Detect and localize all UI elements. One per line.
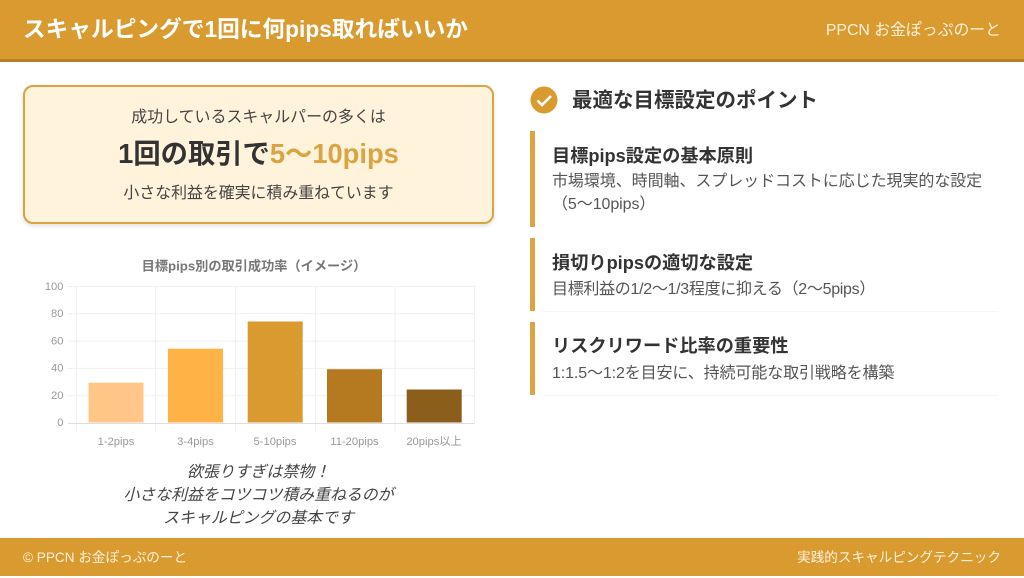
chart caption: 小さな利益をコツコツ積み重ねるのが <box>123 487 394 504</box>
header bar <box>0 0 1024 62</box>
section heading text: 最適な目標設定のポイント <box>572 89 818 112</box>
y axis labels: 60 <box>51 336 64 348</box>
point 2 title: 損切りpipsの適切な設定 <box>552 253 753 273</box>
y axis labels: 40 <box>51 362 64 374</box>
chart title: 目標pips別の取引成功率（イメージ） <box>142 258 366 274</box>
x axis labels: 11-20pips <box>330 436 379 448</box>
y axis labels: 100 <box>45 281 64 293</box>
callout panel <box>23 85 494 224</box>
point 2 accent bar <box>530 238 535 311</box>
point 2 description: 目標利益の1/2〜1/3程度に抑える（2〜5pips） <box>552 280 875 298</box>
x axis labels: 3-4pips <box>177 436 214 448</box>
point 1 description: （5〜10pips） <box>552 196 655 213</box>
footer topic: 実践的スキャルピングテクニック <box>797 550 1001 565</box>
point 3 accent bar <box>530 322 535 395</box>
point 1 accent bar <box>530 131 535 227</box>
callout sub text: 小さな利益を確実に積み重ねています <box>123 185 394 202</box>
title: スキャルピングで1回に何pips取ればいいか <box>23 16 468 42</box>
chart caption: 欲張りすぎは禁物！ <box>187 464 330 481</box>
x axis labels: 20pips以上 <box>406 435 462 448</box>
callout lead text: 成功しているスキャルパーの多くは <box>131 109 386 126</box>
header brand: PPCN お金ぽっぷのーと <box>826 22 1001 39</box>
icon: check circle <box>530 86 558 114</box>
point 3 title: リスクリワード比率の重要性 <box>552 336 788 356</box>
x axis labels: 5-10pips <box>254 436 297 448</box>
point 3 <box>530 322 894 395</box>
footer copyright: © PPCN お金ぽっぷのーと <box>23 550 187 565</box>
footer bar <box>0 538 1024 576</box>
y axis labels: 80 <box>51 308 64 320</box>
point 2 <box>530 238 875 311</box>
bar chart <box>45 258 475 448</box>
x axis labels: 1-2pips <box>98 436 135 448</box>
point 1 <box>530 131 982 227</box>
point 1 description <box>552 172 982 213</box>
x axis labels <box>98 435 462 448</box>
bars <box>88 322 462 422</box>
y axis labels <box>45 281 64 429</box>
point 3 description: 1:1.5〜1:2を目安に、持続可能な取引戦略を構築 <box>552 364 894 382</box>
chart caption <box>123 464 396 527</box>
section heading <box>530 86 818 114</box>
point 1 title: 目標pips設定の基本原則 <box>552 146 753 166</box>
y axis labels: 20 <box>51 390 64 402</box>
point 1 description: 市場環境、時間軸、スプレッドコストに応じた現実的な設定 <box>552 173 982 190</box>
callout key message: 1回の取引で5〜10pips <box>118 138 399 169</box>
chart caption: スキャルピングの基本です <box>163 510 354 527</box>
y axis labels: 0 <box>57 417 64 429</box>
